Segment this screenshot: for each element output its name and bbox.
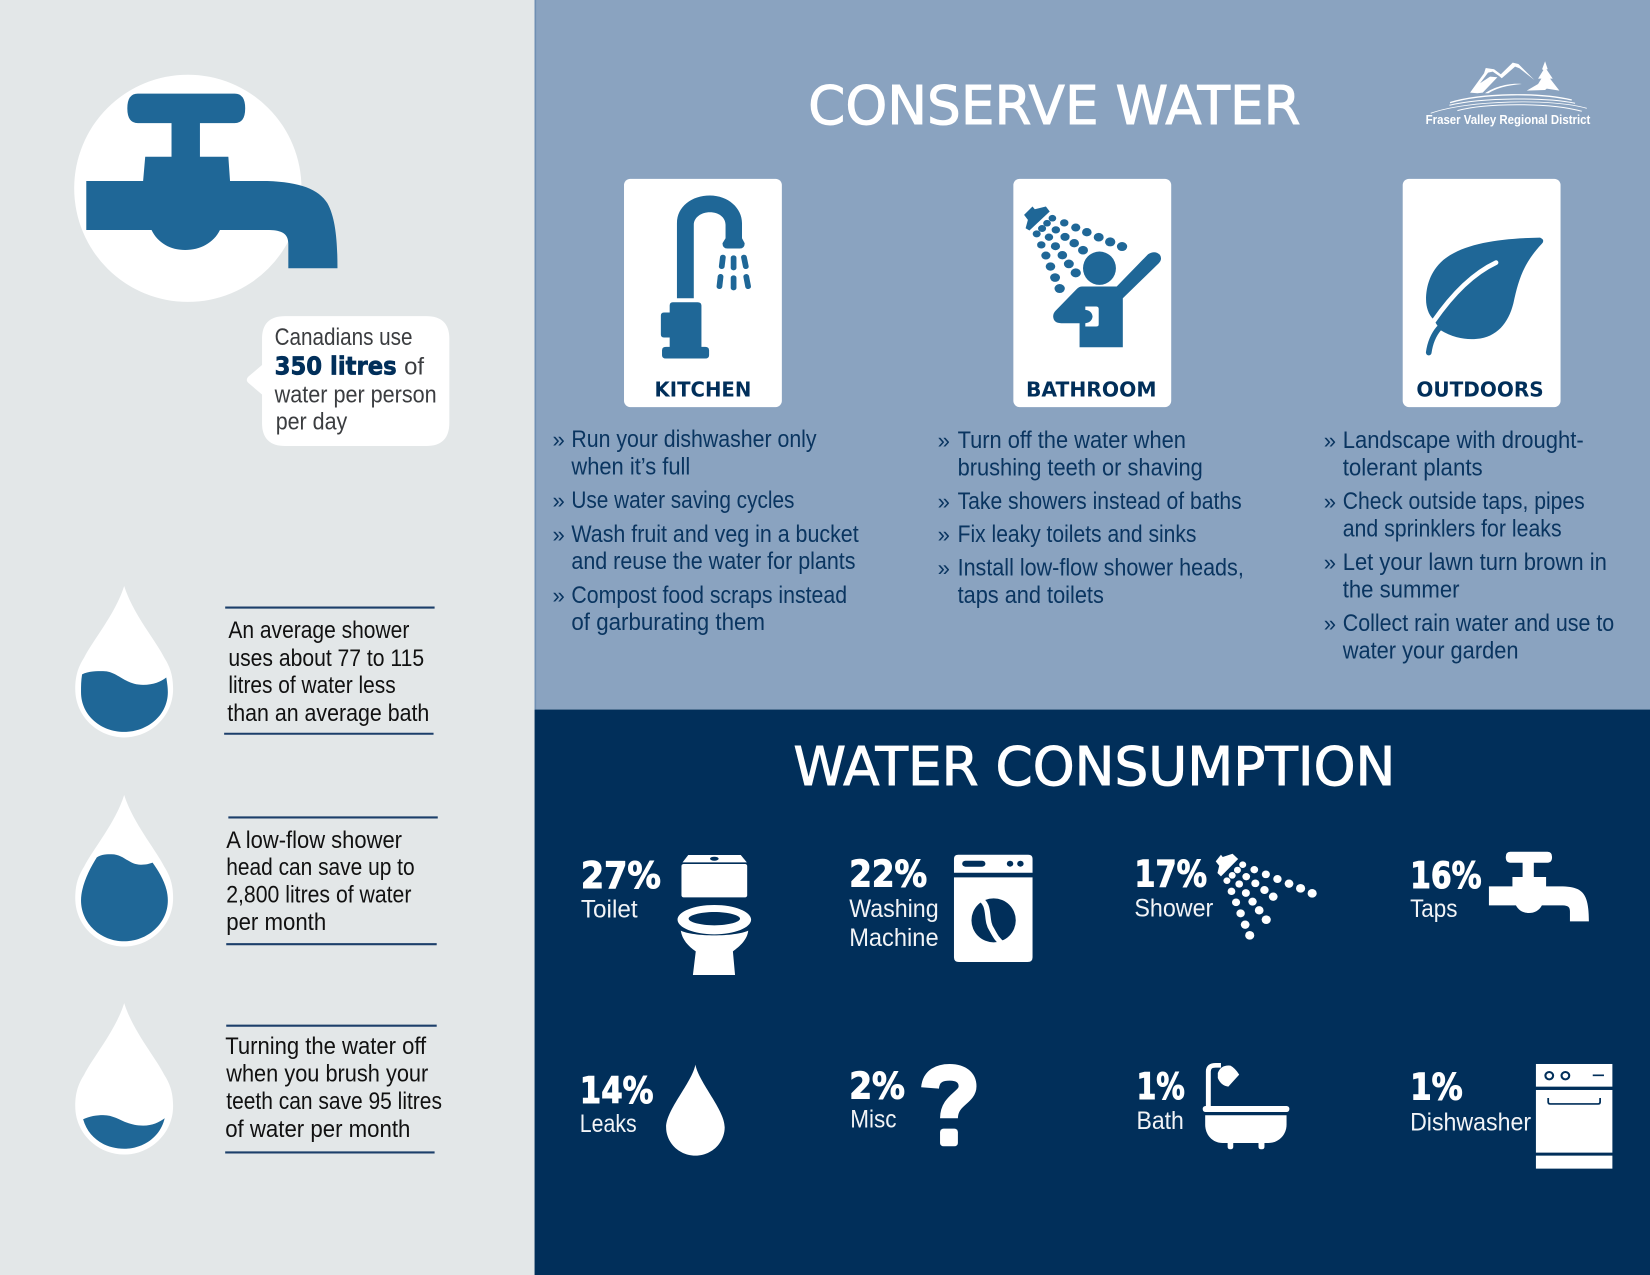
icon: water drop mostly full [75, 795, 173, 946]
stat: washing machine 22%: Washing [849, 896, 939, 923]
callout: 350 litres per day: per day [276, 410, 347, 436]
stat: misc 2%: 2% [849, 1064, 905, 1107]
stat: dishwasher 1% [1410, 1064, 1612, 1169]
text block: outdoors tips: and sprinklers for leaks [1343, 517, 1562, 543]
icon: leaf [1426, 238, 1543, 353]
stat: washing machine 22%: 22% [849, 852, 927, 895]
text block: turning the water off: teeth can save 95 litres [226, 1089, 442, 1115]
stat: toilet 27%: 27% [581, 854, 661, 897]
text block: low-flow shower head [226, 817, 438, 944]
stat: taps 16% [1410, 852, 1589, 923]
text block: turning the water off: Turning the water off [225, 1034, 427, 1060]
text block: outdoors tips: » [1324, 550, 1336, 575]
text block: bathroom tips: Install low-flow shower heads, [958, 555, 1244, 581]
text block: kitchen tips: of garburating them [571, 610, 765, 636]
label: kitchen: KITCHEN [655, 378, 751, 402]
text block: bathroom tips: » [938, 428, 950, 453]
text block: outdoors tips: tolerant plants [1343, 455, 1483, 481]
icon: shower head [1216, 854, 1317, 940]
icon: kitchen faucet [661, 196, 748, 359]
stat: shower 17%: 17% [1134, 852, 1207, 895]
stat: toilet 27%: Toilet [581, 896, 638, 923]
panel: left background [0, 0, 535, 1275]
title: water consumption: WATER CONSUMPTION [793, 735, 1395, 798]
panel: outdoors card [1403, 179, 1561, 407]
stat: taps 16%: Taps [1410, 896, 1457, 923]
callout: 350 litres per day [247, 316, 449, 446]
icon: drop [666, 1065, 725, 1156]
text block: outdoors tips: Collect rain water and use to [1343, 611, 1614, 637]
text block: turning the water off [225, 1026, 442, 1152]
icon: person showering [1024, 207, 1161, 347]
text block: kitchen tips [552, 427, 859, 636]
logo: Fraser Valley Regional District [1426, 61, 1591, 127]
text block: average shower: An average shower [228, 618, 409, 644]
callout: 350 litres per day: 350 litres [275, 352, 397, 381]
text block: outdoors tips [1324, 428, 1614, 665]
text block: average shower: uses about 77 to 115 [228, 646, 424, 672]
text block: low-flow shower head: A low-flow shower [226, 828, 402, 854]
text block: bathroom tips: » [938, 522, 950, 547]
text block: kitchen tips: Wash fruit and veg in a bucket [571, 522, 859, 548]
stat: leaks 14%: 14% [580, 1069, 653, 1112]
text block: outdoors tips: the summer [1343, 578, 1460, 604]
text block: turning the water off: of water per month [225, 1117, 410, 1143]
panel: kitchen card [624, 179, 782, 407]
text block: bathroom tips: Turn off the water when [958, 428, 1186, 454]
text block: bathroom tips [938, 428, 1244, 609]
icon: washing machine [954, 855, 1033, 962]
title: conserve water: CONSERVE WATER [808, 74, 1301, 137]
label: outdoors: OUTDOORS [1416, 378, 1544, 402]
icon: water drop nearly empty [75, 1003, 173, 1155]
stat: dishwasher 1%: 1% [1410, 1065, 1463, 1108]
stat: shower 17% [1134, 852, 1317, 940]
callout: 350 litres per day: water per person [274, 382, 437, 408]
text block: low-flow shower head: head can save up to [226, 855, 415, 881]
text block: outdoors tips: water your garden [1342, 639, 1518, 665]
text block: low-flow shower head: 2,800 litres of water [226, 883, 412, 909]
text block: turning the water off: when you brush your [225, 1061, 428, 1087]
icon: tap [1489, 852, 1589, 921]
icon: toilet [678, 855, 751, 975]
logo: Fraser Valley Regional District: Fraser Valley Regional District [1426, 112, 1591, 127]
text block: kitchen tips: » [552, 522, 565, 547]
icon: large faucet in circle [74, 75, 337, 302]
text block: outdoors tips: Landscape with drought- [1343, 428, 1584, 454]
text block: low-flow shower head: per month [226, 910, 326, 936]
text block: bathroom tips: Take showers instead of baths [958, 489, 1242, 515]
stat: washing machine 22% [849, 852, 1033, 962]
stat: leaks 14% [580, 1065, 725, 1156]
callout: 350 litres per day: of [404, 355, 425, 381]
stat: washing machine 22%: Machine [849, 925, 939, 952]
text block: kitchen tips: » [552, 427, 565, 452]
text block: kitchen tips: and reuse the water for plants [571, 549, 856, 575]
text block: kitchen tips: » [552, 583, 565, 608]
stat: misc 2% [849, 1064, 968, 1146]
icon: question mark [930, 1072, 968, 1146]
text block: outdoors tips: » [1324, 611, 1336, 636]
label: bathroom: BATHROOM [1026, 378, 1156, 402]
icon: water drop half full [75, 586, 173, 737]
stat: bath 1%: Bath [1136, 1108, 1184, 1135]
text block: average shower: litres of water less [228, 673, 396, 699]
text block: kitchen tips: when it’s full [570, 454, 690, 480]
text block: average shower: than an average bath [227, 701, 429, 727]
stat: taps 16%: 16% [1410, 854, 1482, 897]
icon: dishwasher [1536, 1064, 1612, 1169]
stat: bath 1% [1136, 1065, 1289, 1149]
text block: kitchen tips: Run your dishwasher only [571, 427, 817, 453]
panel: conserve water background [535, 0, 1650, 710]
panel: bathroom card [1013, 179, 1171, 407]
icon: bathtub [1203, 1065, 1289, 1149]
stat: shower 17%: Shower [1134, 895, 1213, 922]
stat: misc 2%: Misc [850, 1107, 897, 1134]
text block: kitchen tips: Use water saving cycles [571, 488, 794, 514]
stat: toilet 27% [581, 854, 751, 975]
stat: bath 1%: 1% [1136, 1065, 1185, 1108]
callout: 350 litres per day: Canadians use [275, 325, 412, 351]
text block: average shower [224, 608, 435, 734]
text block: kitchen tips: » [552, 488, 565, 513]
text block: bathroom tips: » [938, 489, 950, 514]
text block: bathroom tips: » [938, 555, 950, 580]
text block: kitchen tips: Compost food scraps instead [571, 583, 847, 609]
stat: dishwasher 1%: Dishwasher [1410, 1109, 1531, 1136]
panel: water consumption background [535, 710, 1650, 1275]
text block: outdoors tips: » [1324, 428, 1336, 453]
text block: outdoors tips: Check outside taps, pipes [1343, 489, 1585, 515]
text block: outdoors tips: Let your lawn turn brown in [1343, 550, 1607, 576]
text block: outdoors tips: » [1324, 489, 1336, 514]
stat: leaks 14%: Leaks [580, 1111, 637, 1138]
text block: bathroom tips: brushing teeth or shaving [958, 455, 1203, 481]
text block: bathroom tips: Fix leaky toilets and sinks [958, 522, 1196, 548]
text block: bathroom tips: taps and toilets [958, 583, 1104, 609]
